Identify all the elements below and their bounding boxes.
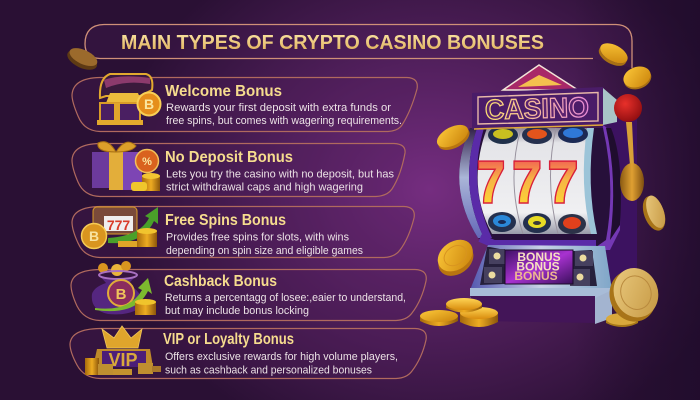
icons: bottom reel symbols xyxy=(488,212,586,234)
heading: Free Spins Bonus xyxy=(165,212,286,229)
description: Returns a percentagg of losee:,eaier to understand, xyxy=(165,292,406,304)
description xyxy=(165,351,398,376)
description: Offers exclusive rewards for high volume players, xyxy=(165,351,398,363)
heading: VIP or Loyalty Bonus xyxy=(163,331,294,348)
description: free spins, but comes with wagering requirements. xyxy=(166,115,402,127)
title text: MAIN TYPES OF CRYPTO CASINO BONUSES xyxy=(121,32,544,54)
gold coin stacks xyxy=(420,298,498,327)
icons: top reel symbols xyxy=(488,125,588,144)
panel: free spins bonus xyxy=(72,206,414,258)
screen xyxy=(505,250,573,284)
panel: cashback bonus xyxy=(71,261,426,320)
bonus panel xyxy=(470,245,612,290)
screen: BONUS xyxy=(517,250,561,264)
description xyxy=(166,168,394,194)
description: such as cashback and personalized bonuses xyxy=(165,364,372,376)
coin upper-left of machine xyxy=(433,120,473,155)
casino roof xyxy=(503,65,578,90)
coin stack right xyxy=(606,313,638,327)
icon: treasure chest xyxy=(97,74,160,125)
sevens: 7 xyxy=(512,150,542,215)
screen: BONUS xyxy=(516,260,560,274)
icon: money bag: B xyxy=(116,286,127,303)
sevens: 7 xyxy=(477,150,505,215)
title banner xyxy=(85,24,632,68)
panel: vip or loyalty bonus xyxy=(70,326,426,378)
coin far right xyxy=(639,193,670,234)
icon: mini slot machine with arrow: 777 xyxy=(107,217,130,233)
icon: money bag xyxy=(92,261,156,315)
description xyxy=(165,292,406,317)
icon: mini slot machine with arrow xyxy=(82,207,158,248)
heading: Welcome Bonus xyxy=(165,83,282,100)
description xyxy=(166,102,402,127)
icon: treasure chest: B xyxy=(144,96,154,112)
icon: mini slot machine with arrow: B xyxy=(89,228,99,244)
icon: top-left coin xyxy=(64,44,101,74)
description: strict withdrawal caps and high wagering xyxy=(166,182,363,194)
sevens xyxy=(477,150,578,215)
panel: no deposit bonus xyxy=(72,142,405,196)
coin top right xyxy=(596,39,631,70)
description: Lets you try the casino with no deposit, but has xyxy=(166,168,394,180)
description: but may include bonus locking xyxy=(165,305,309,317)
slot machine xyxy=(459,65,644,324)
icon: gift box xyxy=(92,142,160,191)
machine right body xyxy=(598,115,637,300)
big coin right xyxy=(602,262,666,328)
coin upper right xyxy=(620,63,654,93)
casino sign xyxy=(472,87,617,129)
description: Rewards your first deposit with extra funds or xyxy=(166,102,391,114)
reel drum xyxy=(459,128,610,247)
lever xyxy=(614,94,644,201)
sevens: 7 xyxy=(548,150,578,215)
icon: vip crown: VIP xyxy=(108,350,138,370)
coin left of machine xyxy=(430,233,481,282)
icon: gift box: % xyxy=(142,156,152,168)
heading: Cashback Bonus xyxy=(164,273,277,290)
casino sign: CASINO xyxy=(485,92,589,125)
machine base xyxy=(470,288,612,324)
description xyxy=(166,232,363,257)
panel: welcome bonus xyxy=(72,74,417,132)
description: Provides free spins for slots, with wins xyxy=(166,232,349,244)
description: depending on spin size and eligible games xyxy=(166,245,363,257)
heading: No Deposit Bonus xyxy=(165,149,293,166)
screen: BONUS xyxy=(514,269,558,283)
icon: vip crown xyxy=(85,326,161,375)
